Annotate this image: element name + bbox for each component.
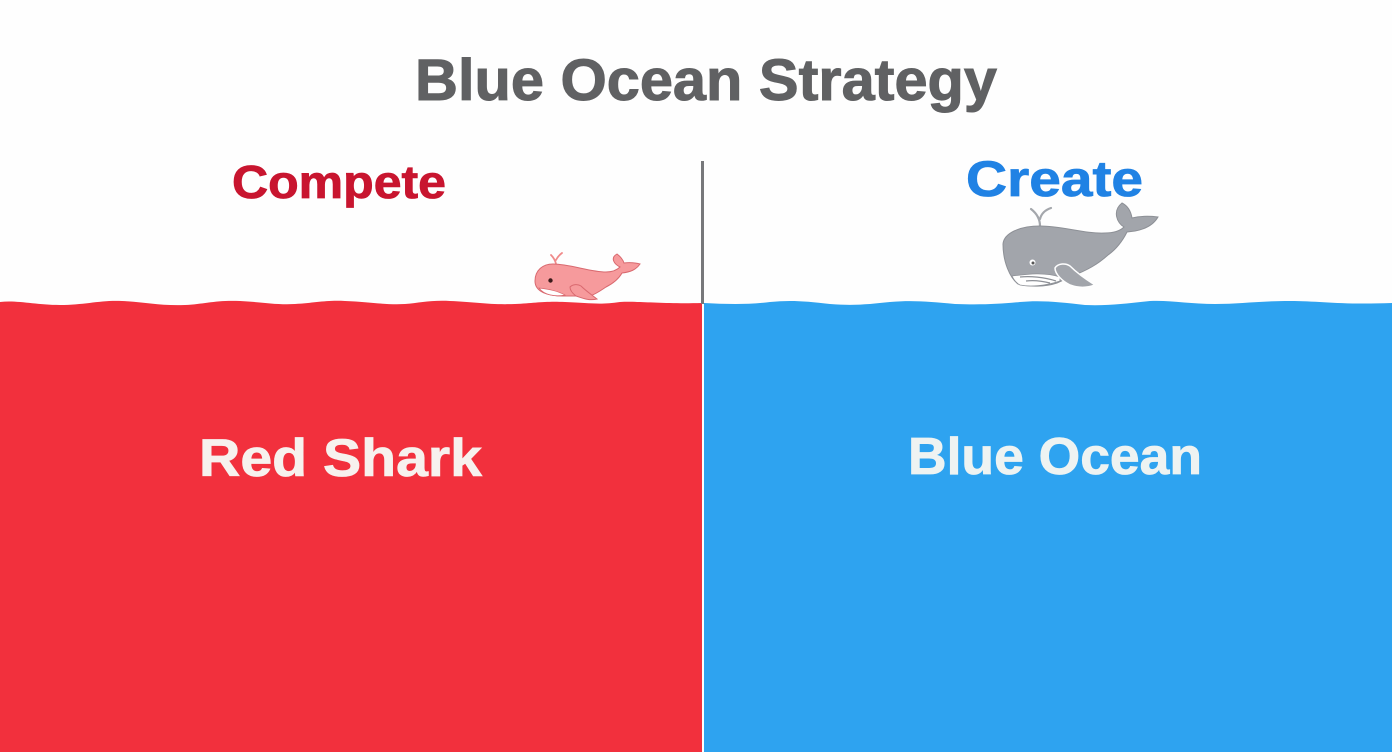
panel: blue ocean: [704, 301, 1392, 752]
title: Blue Ocean Strategy: [415, 48, 997, 113]
label: red shark: Red Shark: [199, 429, 483, 488]
label: blue ocean: Blue Ocean: [908, 428, 1202, 486]
icon: small red whale: [535, 253, 640, 300]
icon: large gray whale: [1003, 203, 1158, 287]
divider: [701, 161, 704, 304]
heading: compete: Compete: [232, 156, 446, 208]
heading: create: Create: [966, 151, 1143, 207]
